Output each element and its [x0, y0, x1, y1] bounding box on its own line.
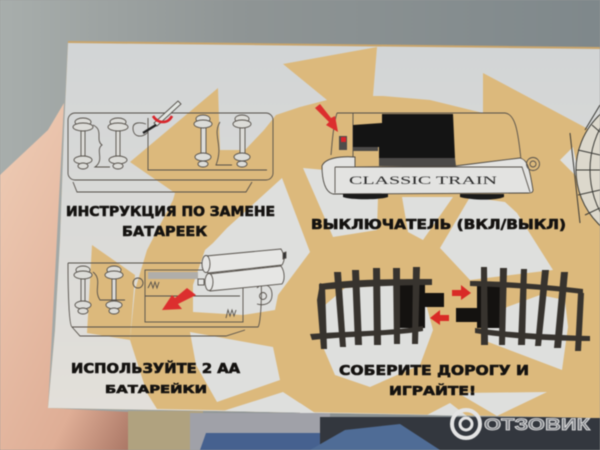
- red arrow: [162, 288, 196, 310]
- heading: assemble: [339, 364, 529, 398]
- heading: use 2 AA: ИСПОЛЬЗУЙТЕ 2 АА: [71, 361, 240, 377]
- track piece left: [310, 267, 444, 349]
- axles: [73, 115, 251, 169]
- batteries: [198, 249, 286, 291]
- heading: battery replacement: [66, 204, 275, 240]
- battery clip ear: [257, 285, 272, 305]
- wheels: [343, 194, 504, 200]
- red arc: [153, 116, 172, 122]
- heading: use 2 AA: БАТАРЕЙКИ: [105, 383, 207, 396]
- track piece right: [456, 267, 590, 351]
- heading: battery replacement: БАТАРЕЕК: [122, 224, 207, 240]
- white shapes in the pattern: [190, 147, 580, 416]
- watermark logo: [452, 410, 480, 438]
- table and jeans below the box: [128, 411, 600, 450]
- heading: assemble: ИГРАЙТЕ!: [389, 383, 476, 398]
- battery replacement diagram: [68, 101, 273, 192]
- heading: assemble: СОБЕРИТЕ ДОРОГУ И: [339, 364, 529, 379]
- box front panel: [48, 41, 600, 418]
- watermark text: ОТЗОВИК: [484, 415, 591, 434]
- coupler ring: [526, 158, 540, 170]
- train body: [322, 157, 533, 194]
- heading: battery replacement: ИНСТРУКЦИЯ ПО ЗАМЕНЕ: [66, 204, 275, 220]
- gray slot: [148, 272, 198, 279]
- train name: CLASSIC TRAIN: [349, 175, 498, 187]
- heading: use 2 AA: [71, 361, 240, 396]
- AA batteries diagram: [68, 249, 286, 336]
- hand holding the box: [0, 103, 170, 450]
- red arrow: [315, 104, 338, 132]
- axles: [74, 266, 123, 314]
- train diagram: [315, 104, 540, 200]
- red arrows between track pieces: [430, 285, 471, 325]
- black tender: [353, 114, 455, 158]
- heading: switch: ВЫКЛЮЧАТЕЛЬ (ВКЛ/ВЫКЛ): [311, 217, 566, 233]
- screwdriver: [143, 101, 181, 133]
- springs: [148, 282, 236, 318]
- power switch: [339, 136, 347, 150]
- background pattern: tan rays and ring: [87, 47, 600, 418]
- globe grid at right edge: [570, 94, 600, 246]
